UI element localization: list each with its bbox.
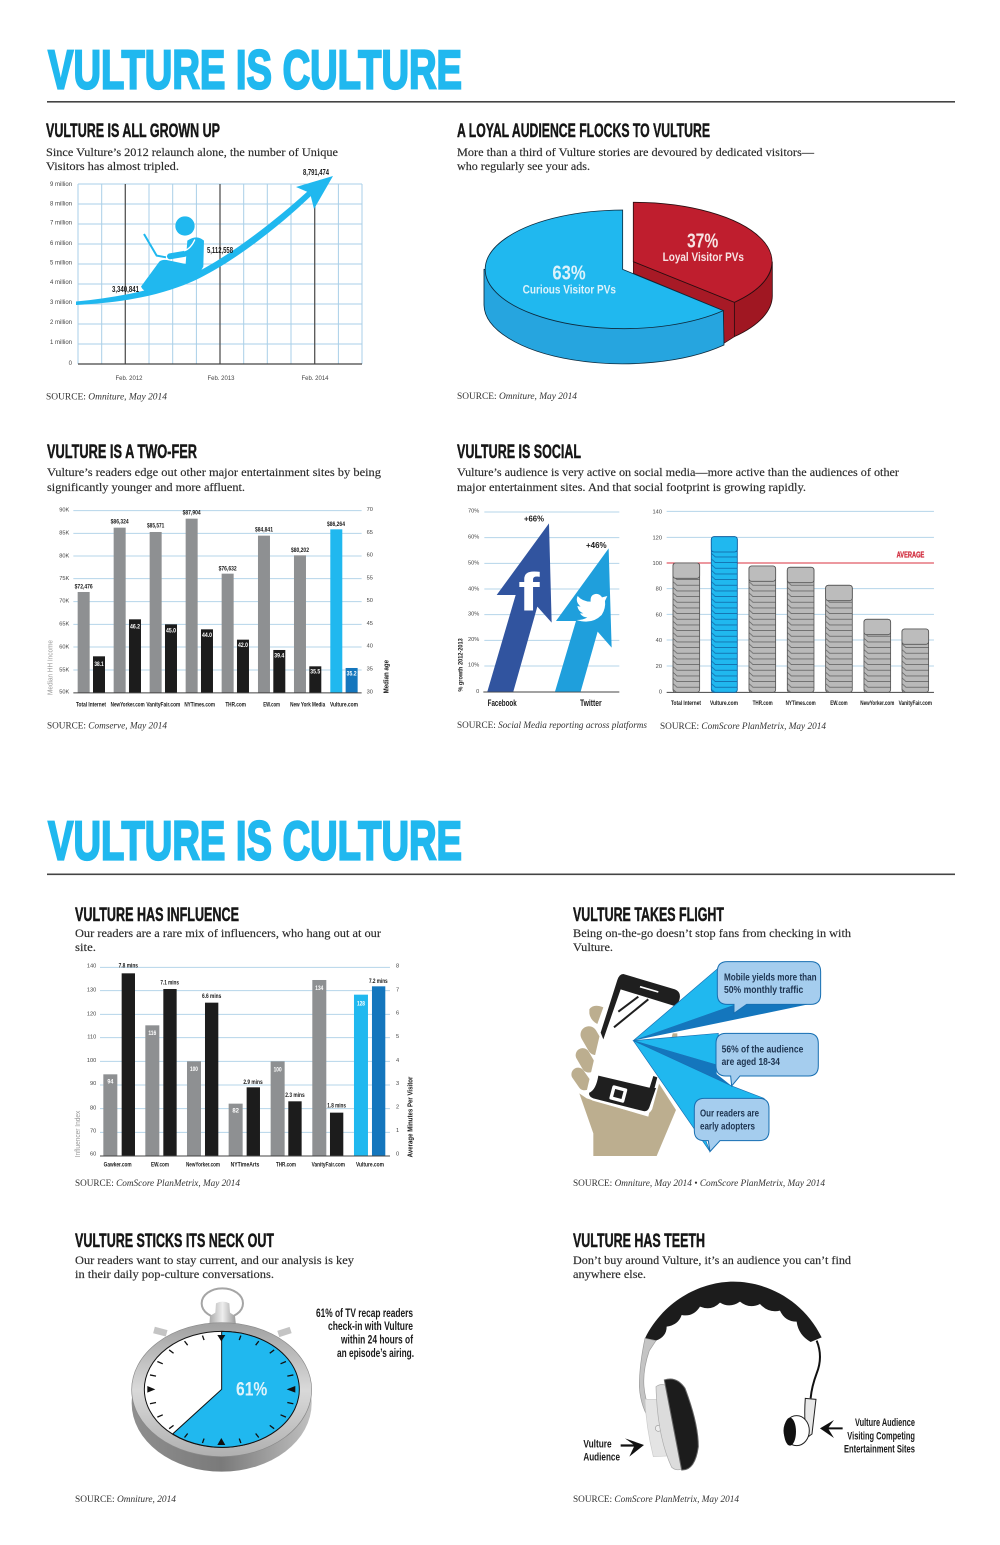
bar chart: influence and minutes: 140 [87, 963, 96, 969]
chart: stacked bars vs average: 60 [656, 612, 662, 618]
bar chart: income and age: 35.2 [347, 671, 357, 677]
bar chart: income and age: $85,571 [147, 523, 165, 529]
bar chart: income and age: $86,264 [327, 522, 346, 528]
callout: recap readers: 61% of TV recap readers [316, 1306, 413, 1320]
bar chart: influence and minutes: Gawker.com [104, 1163, 132, 1169]
callout: recap readers: an episode’s airing. [337, 1346, 414, 1360]
bar chart: influence and minutes: 94 [107, 1080, 114, 1086]
bubble: audience age [716, 1033, 818, 1086]
label: curious visitors: 63% [552, 262, 586, 284]
line chart: unique visitors: 8 million [50, 202, 72, 208]
ray: bubble 3 [633, 1041, 764, 1152]
heading: A LOYAL AUDIENCE FLOCKS TO VULTURE [457, 121, 710, 142]
icon: stopwatch: 61% [236, 1380, 267, 1401]
label: vulture audience [583, 1438, 644, 1464]
bar chart: influence and minutes: 7 [396, 987, 399, 993]
bar chart: income and age: 90K [59, 508, 70, 514]
intro text: Vulture’s audience is very active on social media—more active than the audiences of other [457, 465, 899, 479]
bar chart: influence and minutes: 100 [87, 1058, 96, 1064]
data values: 8,791,474 [303, 168, 329, 177]
chart: stacked bars vs average: 80 [656, 587, 662, 593]
chart: stacked bars vs average: AVERAGE [897, 551, 925, 560]
bar chart: income and age: 35.5 [310, 670, 321, 676]
bar chart: income and age: $80,202 [291, 548, 310, 554]
bar chart: influence and minutes: NewYorker.com [186, 1163, 220, 1169]
bar chart: income and age: 46.2 [130, 625, 141, 631]
intro text: Don’t buy around Vulture, it’s an audience you can’t find [573, 1253, 851, 1267]
bar chart: influence and minutes: Average Minutes Per Visitor [405, 1077, 414, 1157]
panel: all grown up [46, 121, 362, 402]
bubble: mobile traffic: 50% monthly traffic [724, 985, 804, 996]
source: SOURCE: Omniture, May 2014 • ComScore PlanMetrix, May 2014 [573, 1178, 825, 1189]
line chart: unique visitors: 5 million [50, 260, 72, 266]
bubble: early adopters: early adopters [700, 1121, 755, 1132]
intro text [573, 926, 851, 954]
heading: VULTURE HAS TEETH [573, 1231, 705, 1252]
panel: social [457, 442, 934, 732]
bar chart: income and age: Total Internet [76, 703, 106, 709]
bar chart: income and age: THR.com [225, 703, 246, 709]
label: competing sites: Entertainment Sites [844, 1444, 915, 1456]
bar chart: influence and minutes: 100 [190, 1067, 199, 1073]
chart: social growth arrows: 30% [468, 612, 479, 618]
bar chart: income and age: 42.0 [238, 643, 249, 649]
heading: VULTURE HAS INFLUENCE [75, 905, 239, 926]
intro text [573, 1253, 851, 1281]
line chart: unique visitors: 2 million [50, 320, 72, 326]
bubble: mobile traffic [717, 962, 821, 1013]
bar chart: income and age: $84,841 [255, 528, 274, 534]
bubble: audience age: 56% of the audience [722, 1044, 804, 1055]
bar chart: influence and minutes: 134 [315, 986, 324, 992]
arrow: to headphone cup [621, 1438, 644, 1457]
bar chart: income and age: EW.com [263, 703, 280, 709]
bar chart: influence and minutes: VanityFair.com [312, 1163, 345, 1169]
chart: social growth arrows: 60% [468, 534, 479, 540]
growth arrow [76, 176, 333, 305]
line chart: unique visitors: 7 million [50, 220, 72, 226]
chart: stacked bars vs average: 40 [656, 638, 662, 644]
bar chart: income and age: 50 [367, 598, 373, 604]
heading: VULTURE IS SOCIAL [457, 442, 581, 463]
line chart: unique visitors: 6 million [50, 241, 72, 247]
label: competing sites: Vulture Audience [855, 1417, 915, 1429]
line chart: unique visitors [50, 168, 362, 382]
bar chart: income and age: 85K [59, 531, 70, 537]
bar chart: influence and minutes: 7.8 mins [119, 963, 139, 969]
callout: recap readers: check-in with Vulture [328, 1319, 413, 1333]
chart: stacked bars vs average: 0 [659, 689, 662, 695]
icon: person with laptop [141, 216, 204, 293]
icon: phone [589, 974, 680, 1112]
chart: stacked bars vs average: 100 [653, 561, 662, 567]
bar chart: influence and minutes: 100 [274, 1068, 282, 1074]
intro text [75, 1253, 354, 1281]
bar chart: influence and minutes: 7.2 mins [369, 979, 388, 985]
chart: social growth arrows: % growth 2012-2013 [459, 638, 465, 692]
ray: bubble 2 [633, 1033, 732, 1086]
source: SOURCE: Omniture, 2014 [75, 1494, 176, 1505]
bar chart: income and age: 39.4 [274, 653, 285, 659]
panel: loyal audience [457, 121, 815, 402]
chart: social growth arrows: 0 [476, 689, 479, 695]
chart: stacked bars vs average: Total Internet [671, 701, 701, 707]
chart: social growth arrows: +66% [524, 514, 545, 524]
bar chart: income and age: $87,904 [183, 511, 201, 517]
intro text: significantly younger and more affluent. [47, 480, 245, 494]
data values [112, 168, 329, 294]
bar chart: influence and minutes: 2.9 mins [243, 1080, 263, 1086]
panel: influence [73, 905, 414, 1189]
bar chart: influence and minutes: 128 [357, 1002, 365, 1008]
chart: stacked bars vs average [653, 509, 934, 707]
chart: stacked bars vs average: 20 [656, 664, 662, 670]
panel: has teeth [573, 1231, 915, 1505]
bar chart: income and age: VanityFair.com [146, 703, 180, 709]
label: loyal visitors: 37% [687, 230, 718, 252]
title: second section: VULTURE IS CULTURE [48, 810, 462, 872]
ray: bubble 1 [633, 967, 810, 1041]
bar chart: income and age: 70 [367, 507, 373, 513]
bar chart: influence and minutes: 0 [396, 1152, 399, 1158]
bar chart: influence and minutes: 6.6 mins [202, 994, 222, 1000]
heading: VULTURE IS ALL GROWN UP [46, 121, 220, 142]
title: top: VULTURE IS CULTURE [48, 38, 462, 100]
intro text: Our readers are a rare mix of influencers, who hang out at our [75, 926, 381, 940]
panel: takes flight [569, 905, 851, 1189]
label: vulture audience: Vulture [583, 1439, 612, 1451]
bar chart: influence and minutes: Vulture.com [356, 1163, 384, 1169]
bar chart: income and age: 60K [59, 644, 70, 650]
heading: VULTURE STICKS ITS NECK OUT [75, 1231, 274, 1252]
bar chart: income and age: Vulture.com [330, 703, 358, 709]
line chart: unique visitors: 1 million [50, 340, 72, 346]
bar chart: income and age: 30 [367, 689, 373, 695]
chart: social growth arrows: 10% [468, 663, 479, 669]
chart: social growth arrows: 70% [468, 509, 479, 515]
bar chart: income and age: 80K [59, 553, 70, 559]
chart: social growth arrows: Twitter [580, 698, 602, 708]
bar chart: income and age [46, 507, 390, 709]
chart: stacked bars vs average: Vulture.com [710, 701, 738, 707]
bar chart: income and age: 45.0 [166, 628, 177, 634]
bubble: early adopters: Our readers are [700, 1108, 759, 1119]
panel: neck out [75, 1231, 414, 1505]
bar chart: influence and minutes: 4 [396, 1058, 399, 1064]
bar chart: influence and minutes: 70 [90, 1129, 96, 1135]
intro text: in their daily pop-culture conversations. [75, 1267, 274, 1281]
arrow: to earbud [820, 1420, 843, 1438]
illustration: phone and speech bubbles [569, 962, 821, 1156]
bar chart: influence and minutes: 8 [396, 963, 399, 969]
intro text: site. [75, 940, 96, 954]
bar chart: income and age: 45 [367, 621, 373, 627]
bar chart: income and age: 75K [59, 576, 70, 582]
bar chart: income and age: 40 [367, 644, 373, 650]
bar chart: income and age: NYTimes.com [184, 703, 215, 709]
intro text: anywhere else. [573, 1267, 646, 1281]
line chart: unique visitors: 4 million [50, 280, 72, 286]
intro text: Since Vulture’s 2012 relaunch alone, the number of Unique [46, 145, 338, 159]
label: curious visitors: Curious Visitor PVs [523, 282, 616, 296]
bar chart: influence and minutes: NYTimeArts [231, 1163, 260, 1169]
bar chart: income and age: $72,476 [75, 585, 93, 591]
source: social: SOURCE: Social Media reporting across platforms [457, 720, 647, 731]
panel: two-fer [46, 442, 390, 732]
intro text: Visitors has almost tripled. [46, 159, 179, 173]
data values: 5,112,558 [207, 246, 233, 255]
source: SOURCE: Omniture, May 2014 [457, 391, 577, 402]
heading: VULTURE TAKES FLIGHT [573, 905, 724, 926]
line chart: unique visitors: Feb. 2013 [207, 376, 235, 382]
bar chart: income and age: 50K [59, 690, 70, 696]
label: curious visitors [523, 262, 616, 296]
bar chart: income and age: New York Media [290, 703, 326, 709]
bar chart: income and age: 44.0 [202, 633, 213, 639]
chart: social growth arrows: Facebook [488, 698, 517, 708]
source: SOURCE: Comserve, May 2014 [47, 720, 167, 732]
intro text [457, 465, 899, 494]
bar chart: influence and minutes: 6 [396, 1011, 399, 1017]
line chart: unique visitors: 0 [69, 361, 73, 367]
bar chart: income and age: NewYorker.com [111, 703, 145, 709]
chart: social growth arrows: 50% [468, 560, 479, 566]
line chart: unique visitors: 3 million [50, 300, 72, 306]
intro text [47, 465, 381, 494]
bar chart: influence and minutes: 80 [90, 1105, 96, 1111]
bubble: early adopters [694, 1098, 769, 1152]
bar chart: influence and minutes: THR.com [276, 1163, 296, 1169]
arrow: Twitter [555, 548, 612, 692]
source: SOURCE: ComScore PlanMetrix, May 2014 [573, 1494, 739, 1505]
line chart: unique visitors: Feb. 2012 [115, 376, 143, 382]
bar chart: income and age: 65 [367, 530, 373, 536]
bar chart: influence and minutes: EW.com [151, 1163, 169, 1169]
heading: VULTURE IS A TWO-FER [47, 442, 197, 463]
chart: social growth arrows [459, 509, 619, 708]
intro text: Vulture. [573, 940, 613, 954]
bar chart: influence and minutes: 90 [90, 1081, 96, 1087]
label: competing sites [820, 1417, 915, 1456]
bar chart: income and age: 55 [367, 575, 373, 581]
bar chart: influence and minutes: 5 [396, 1034, 399, 1040]
arrow: Facebook: f [518, 563, 540, 622]
bar chart: influence and minutes: 110 [87, 1034, 96, 1040]
bar chart: influence and minutes: 1 [396, 1128, 399, 1134]
chart: stacked bars vs average: NYTimes.com [786, 701, 816, 707]
arrow: Facebook [487, 523, 552, 692]
intro text [46, 145, 338, 173]
chart: stacked bars vs average: EW.com [830, 701, 848, 707]
chart: social growth arrows: +46% [586, 540, 607, 550]
source: SOURCE: Omniture, May 2014 [46, 392, 167, 402]
bar chart: influence and minutes [73, 963, 414, 1169]
bar chart: influence and minutes: 1.8 mins [327, 1104, 346, 1110]
intro text [457, 145, 815, 173]
line chart: unique visitors: 9 million [50, 182, 72, 188]
label: loyal visitors [663, 230, 744, 264]
bar chart: income and age: 65K [59, 622, 70, 628]
bar chart: income and age: $86,324 [111, 519, 129, 525]
bar chart: influence and minutes: 3 [396, 1081, 399, 1087]
label: loyal visitors: Loyal Visitor PVs [663, 250, 744, 264]
chart: stacked bars vs average: THR.com [753, 701, 773, 707]
icon: hand [569, 1006, 677, 1156]
intro text: who regularly see your ads. [457, 159, 590, 173]
intro text: Vulture’s readers edge out other major entertainment sites by being [47, 465, 381, 479]
label: competing sites: Visiting Competing [847, 1430, 915, 1442]
bar chart: income and age: 38.1 [94, 662, 104, 668]
source: SOURCE: ComScore PlanMetrix, May 2014 [75, 1178, 240, 1189]
intro text [75, 926, 381, 954]
bar chart: income and age: 60 [367, 553, 373, 559]
chart: social growth arrows: 40% [468, 586, 479, 592]
chart: stacked bars vs average: NewYorker.com [860, 701, 894, 707]
bar chart: influence and minutes: 82 [232, 1108, 240, 1114]
chart: stacked bars vs average: VanityFair.com [899, 701, 932, 707]
bar chart: influence and minutes: 60 [90, 1152, 96, 1158]
bar chart: influence and minutes: 2.3 mins [285, 1093, 305, 1099]
bar chart: income and age: Median age [381, 660, 390, 693]
chart: social growth arrows: 20% [468, 637, 479, 643]
bar chart: income and age: 35 [367, 667, 373, 673]
source: comscore: SOURCE: ComScore PlanMetrix, May 2014 [660, 721, 826, 732]
bar chart: influence and minutes: 116 [148, 1031, 157, 1037]
bar chart: income and age: 70K [59, 599, 70, 605]
chart: stacked bars vs average: 140 [653, 509, 662, 515]
callout: recap readers [316, 1306, 414, 1360]
label: vulture audience: Audience [583, 1452, 620, 1464]
bar chart: income and age: 55K [59, 667, 70, 673]
bubble: mobile traffic: Mobile yields more than [724, 973, 817, 984]
bar chart: influence and minutes: 2 [396, 1105, 399, 1111]
icon: stopwatch [132, 1288, 312, 1472]
callout: recap readers: within 24 hours of [340, 1332, 414, 1346]
data values: 3,340,841 [112, 285, 139, 294]
chart: stacked bars vs average: 120 [653, 535, 662, 541]
intro text: major entertainment sites. And that social footprint is growing rapidly. [457, 480, 806, 494]
line chart: unique visitors: Feb. 2014 [301, 376, 329, 382]
bar chart: income and age: Median HH Income [46, 640, 55, 695]
bar chart: influence and minutes: Influencer Index [73, 1110, 82, 1157]
bubble: audience age: are aged 18-34 [722, 1057, 781, 1068]
bar chart: income and age: $76,632 [219, 566, 237, 572]
intro text: Our readers want to stay current, and our analysis is key [75, 1253, 354, 1267]
3D pie chart [484, 202, 772, 364]
icon: headphones [639, 1282, 822, 1470]
intro text: More than a third of Vulture stories are devoured by dedicated visitors— [457, 145, 815, 159]
bar chart: influence and minutes: 7.1 mins [160, 980, 180, 986]
bar chart: influence and minutes: 130 [87, 987, 96, 993]
intro text: Being on-the-go doesn’t stop fans from checking in with [573, 926, 851, 940]
bar chart: influence and minutes: 120 [87, 1012, 96, 1018]
